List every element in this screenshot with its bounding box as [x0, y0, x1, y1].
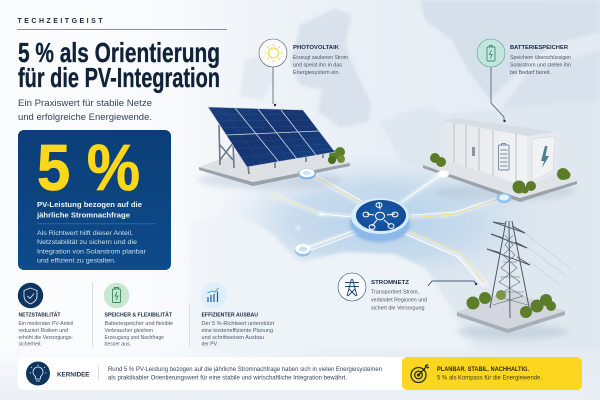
benefit: Speicher und Flexibilität: Batteriespeicher und flexible [104, 321, 173, 327]
network lines [273, 170, 504, 287]
panel heading [36, 200, 142, 220]
benefit: Netzstabilität: NETZSTABILITÄT [18, 312, 61, 318]
icon: shield [24, 288, 37, 304]
callout: Stromnetz: verbindet Regionen und [371, 298, 427, 304]
callout: Stromnetz: sichert die Versorgung. [371, 306, 426, 312]
door seams [454, 123, 516, 183]
title [18, 37, 220, 93]
container top [443, 118, 558, 136]
illustration: solar installation [198, 107, 350, 189]
panel heading: PV-Leistung bezogen auf die [37, 200, 142, 209]
panel body text: Netzstabilität zu sichern und die [37, 239, 138, 246]
yellow callout: PLANBAR. STABIL. NACHHALTIG. [437, 366, 529, 373]
panel body text [37, 230, 146, 264]
platform [456, 325, 568, 339]
panel body text: und effizient zu gestalten. [37, 258, 116, 264]
illustration: battery storage [423, 118, 577, 203]
battery symbol [498, 144, 509, 170]
panel body text: Als Richtwert hilft dieser Anteil, [37, 230, 133, 237]
callout: Stromnetz: STROMNETZ [371, 280, 409, 286]
callout: Stromnetz [338, 273, 477, 312]
benefit: Speicher und Flexibilität [104, 283, 173, 348]
icon: target [411, 364, 429, 382]
lattice [487, 221, 530, 318]
benefit: Netzstabilität: sicherheit. [18, 342, 42, 348]
benefit: Effizienter Ausbau: Der 5 %-Richtwert unterstützt [202, 321, 275, 327]
callout: Photovoltaik: PHOTOVOLTAIK [293, 45, 340, 51]
bushes [430, 153, 570, 194]
yellow callout: 5 % als Kompass für die Energiewende. [437, 376, 542, 382]
callout: Stromnetz: Transportiert Strom, [371, 290, 419, 296]
title: für die PV-Integration [18, 62, 220, 93]
benefit: Effizienter Ausbau: der PV. [202, 342, 218, 348]
node glows [295, 212, 447, 256]
key idea bar: als praktikabler Orientierungswert für eine stabile und wirtschaftliche Integration bewährt. [108, 376, 347, 382]
platform [198, 171, 342, 189]
panel array [208, 107, 335, 167]
benefit: Effizienter Ausbau: und schrittweisen Ausbau [202, 335, 264, 341]
callout: Batteriespeicher: Solarstrom und stellen ihn [510, 62, 571, 68]
benefit: Netzstabilität [18, 283, 73, 348]
benefit: Netzstabilität: Ein moderater PV-Anteil [18, 321, 73, 327]
benefit: Effizienter Ausbau: EFFIZIENTER AUSBAU [202, 312, 258, 318]
icon: rising chart [208, 288, 218, 302]
callout: Photovoltaik: Erzeugt sauberen Strom [293, 55, 348, 61]
yellow callout [402, 357, 582, 390]
icon: sun [264, 44, 282, 62]
node under solar [298, 168, 316, 180]
illustration: transmission tower [456, 221, 570, 339]
key idea bar [18, 357, 413, 390]
bushes [466, 290, 556, 318]
benefit: Speicher und Flexibilität: Verbraucher gleichen [104, 328, 153, 334]
header label: TECHZEITGEIST [18, 18, 103, 25]
callout: Batteriespeicher: bei Bedarf bereit. [510, 70, 551, 76]
bushes [328, 147, 345, 164]
subtitle: Ein Praxiswert für stabile Netze [18, 98, 152, 108]
key idea bar: KERNIDEE [57, 372, 90, 378]
conductor wires [525, 233, 570, 285]
benefit: Effizienter Ausbau: eine kosteneffiziente Planung [202, 328, 273, 334]
icon: battery [112, 288, 120, 302]
panel heading: jährliche Stromnachfrage [36, 210, 130, 220]
container right face [527, 132, 558, 187]
panel: 5 % key figure [18, 130, 171, 270]
benefit: Speicher und Flexibilität: SPEICHER & FLEXIBILITÄT [104, 312, 173, 318]
icon: pylon [345, 279, 359, 296]
icon: light bulb [30, 364, 46, 381]
title: 5 % als Orientierung [18, 37, 220, 68]
callout: Photovoltaik [259, 39, 348, 106]
benefit: Netzstabilität: erhöht die Versorgungs- [18, 335, 73, 341]
big number: 5 % [37, 131, 140, 204]
benefit: Speicher und Flexibilität: Erzeugung und Nachfrage [104, 335, 164, 341]
callout: Batteriespeicher [477, 39, 571, 122]
benefit: Speicher und Flexibilität: besser aus. [104, 342, 131, 348]
callout: Batteriespeicher: Speichern überschüssigen [510, 55, 571, 61]
lightning bolt [541, 146, 549, 168]
hub network icon [363, 203, 398, 229]
benefit: Effizienter Ausbau [201, 282, 275, 348]
legs [219, 125, 323, 174]
subtitle: und erfolgreiche Energiewende. [18, 112, 152, 122]
callout: Batteriespeicher: BATTERIESPEICHER [510, 45, 569, 51]
subtitle [18, 98, 152, 122]
panel body text: Integration von Solarstrom planbar [37, 248, 146, 256]
key idea bar: Rund 5 % PV-Leistung bezogen auf die jährliche Stromnachfrage haben sich in vielen Energiesystemen [108, 367, 382, 373]
benefit: Netzstabilität: reduziert Risiken und [18, 328, 68, 334]
callout: Photovoltaik: Energiesystem ein. [293, 70, 340, 76]
nodes near battery [437, 170, 449, 178]
water glow [215, 152, 555, 292]
callout: Photovoltaik: und speist ihn in das [293, 62, 343, 68]
central network hub [350, 198, 410, 242]
icon: battery [487, 46, 495, 61]
platform [435, 183, 575, 201]
container left face [443, 121, 527, 187]
